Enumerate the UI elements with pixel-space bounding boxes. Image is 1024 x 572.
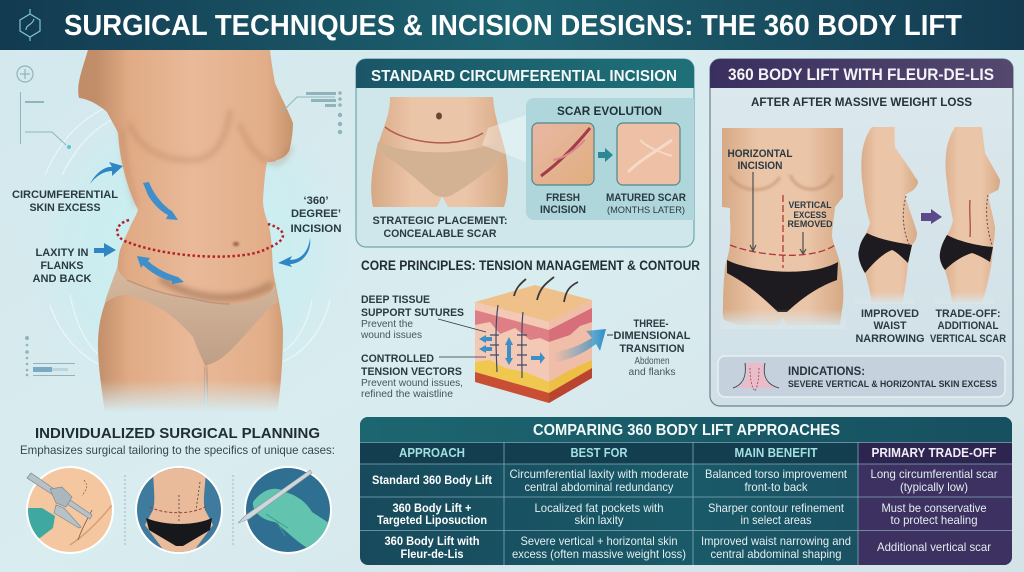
row: standard 360 body lift: front-to back <box>744 480 808 494</box>
row: standard 360 body lift: Standard 360 Body Lift <box>372 473 492 487</box>
vertical incision line <box>782 195 784 268</box>
row: targeted liposuction: Targeted Liposuction <box>377 513 487 527</box>
label: controlled tension vectors: CONTROLLED <box>361 353 434 365</box>
label: fresh incision: INCISION <box>540 204 586 216</box>
caption: STRATEGIC PLACEMENT: <box>372 215 508 227</box>
panel: core principles <box>360 258 700 403</box>
soft chest and waist shading <box>122 112 290 205</box>
label: horizontal incision <box>728 148 793 172</box>
label: trade-off <box>930 308 1006 345</box>
arrow: horizontal incision <box>750 172 806 254</box>
arrow: before to after <box>921 209 942 224</box>
header row: MAIN BENEFIT <box>734 446 818 460</box>
header row <box>399 446 997 460</box>
label: 360 degree incision: ‘360’ <box>304 195 328 207</box>
label: laxity in flanks and back: AND BACK <box>32 273 92 285</box>
row: targeted liposuction: Sharper contour refinement <box>708 501 845 515</box>
table title band <box>360 417 1012 442</box>
heading: SCAR EVOLUTION <box>557 104 662 118</box>
label: laxity in flanks and back: FLANKS <box>40 260 84 272</box>
label: horizontal incision: INCISION <box>738 160 783 172</box>
muscle layer <box>475 372 549 403</box>
panel: scar evolution <box>526 98 694 220</box>
title: SURGICAL TECHNIQUES & INCISION DESIGNS: THE 360 BODY LIFT <box>64 10 962 42</box>
label: deep tissue support sutures <box>360 294 464 341</box>
label: controlled tension vectors: Prevent wound issues, <box>361 377 463 389</box>
header row background <box>360 442 858 464</box>
image: fresh incision <box>532 123 594 185</box>
divider <box>232 475 234 547</box>
label: circumferential skin excess: SKIN EXCESS <box>30 202 100 214</box>
heading: STANDARD CIRCUMFERENTIAL INCISION <box>371 68 677 85</box>
label: deep tissue support sutures: Prevent the <box>361 318 413 330</box>
label: circumferential skin excess: CIRCUMFERENTIAL <box>12 189 118 201</box>
arrow: lower abdomen tension <box>137 256 184 284</box>
icon: logo hexagon <box>20 9 40 41</box>
row: standard 360 body lift: Balanced torso improvement <box>705 467 848 481</box>
label: horizontal incision: HORIZONTAL <box>728 148 793 160</box>
label: trade-off: TRADE-OFF: <box>936 308 1000 320</box>
label: laxity in flanks and back: LAXITY IN <box>36 247 89 259</box>
text: INDICATIONS: <box>788 366 865 378</box>
heading: CORE PRINCIPLES: TENSION MANAGEMENT & CONTOUR <box>361 258 700 273</box>
row: fleur-de-lis: 360 Body Lift with <box>384 534 480 548</box>
label: fresh incision: FRESH <box>546 192 580 204</box>
torso illustration <box>78 50 293 420</box>
header row: PRIMARY TRADE-OFF <box>872 446 997 460</box>
label: matured scar: (MONTHS LATER) <box>607 205 685 216</box>
header row: APPROACH <box>399 446 465 460</box>
row: fleur-de-lis: Severe vertical + horizontal skin <box>520 534 678 548</box>
label: three-dimensional transition: THREE- <box>634 318 669 330</box>
icon: gloved hand with surgical marker <box>238 467 332 553</box>
label: vertical excess removed: REMOVED <box>788 219 833 229</box>
label: vertical excess removed: EXCESS <box>794 210 826 220</box>
fat layer <box>475 360 549 393</box>
label: deep tissue support sutures: SUPPORT SUTURES <box>361 307 464 319</box>
icon: plus badge <box>17 66 33 82</box>
icon: calipers measuring skin <box>24 467 113 553</box>
heading band <box>356 59 694 88</box>
chest shading <box>730 175 833 190</box>
skin cross-section diagram <box>475 277 606 403</box>
label: 360 degree incision: INCISION <box>290 223 342 235</box>
side view figure: after <box>935 127 1000 304</box>
row: targeted liposuction: Must be conservative <box>882 501 987 515</box>
label: three-dimensional transition: and flanks <box>628 366 676 378</box>
label: trade-off: VERTICAL SCAR <box>930 333 1006 345</box>
label: matured scar <box>606 192 686 216</box>
label: 360 degree incision: DEGREE’ <box>291 208 341 220</box>
horizontal incision line <box>730 245 835 255</box>
callout: indications <box>718 356 1005 397</box>
icon: marked torso <box>136 465 222 556</box>
label: 360 degree incision <box>290 195 342 235</box>
label: matured scar: MATURED SCAR <box>606 192 686 204</box>
label: vertical excess removed <box>788 200 833 229</box>
label: controlled tension vectors: TENSION VECTORS <box>361 366 462 378</box>
left face dermis <box>475 302 549 403</box>
table title: COMPARING 360 BODY LIFT APPROACHES <box>533 422 840 439</box>
arrow: three-dimensional transition <box>554 329 606 362</box>
divider <box>124 475 126 547</box>
magnifier connector <box>482 115 526 162</box>
heading band <box>710 59 1013 88</box>
row: standard 360 body lift: (typically low) <box>900 480 968 494</box>
row: targeted liposuction: to protect healing <box>890 513 978 527</box>
row: targeted liposuction: 360 Body Lift + <box>392 501 472 515</box>
pink upper layer <box>475 310 549 342</box>
row: targeted liposuction: Localized fat pockets with <box>534 501 664 515</box>
caption <box>372 215 508 240</box>
label: three-dimensional transition: TRANSITION <box>620 343 685 355</box>
label: controlled tension vectors: refined the waistline <box>361 388 453 400</box>
header row: BEST FOR <box>570 446 628 460</box>
row: targeted liposuction: in select areas <box>740 513 812 527</box>
leader lines <box>438 319 486 357</box>
label: three-dimensional transition <box>607 318 691 378</box>
trade-off header background <box>858 442 1012 464</box>
label: fresh incision <box>540 192 586 216</box>
label: deep tissue support sutures: wound issues <box>360 329 422 341</box>
arrow: circumferential skin excess <box>90 162 123 184</box>
image: matured scar <box>617 123 680 185</box>
row: fleur-de-lis: Improved waist narrowing and <box>701 534 851 548</box>
heading: INDIVIDUALIZED SURGICAL PLANNING <box>35 425 320 442</box>
trade-off column shading <box>858 442 1012 565</box>
label: improved waist narrowing: IMPROVED <box>861 308 919 320</box>
arrow: torso tension <box>143 182 178 220</box>
label: improved waist narrowing: WAIST <box>874 320 907 332</box>
row: fleur-de-lis: excess (often massive weight loss) <box>512 547 686 561</box>
arrow: laxity in flanks <box>94 243 116 257</box>
row: fleur-de-lis: Additional vertical scar <box>877 540 991 554</box>
comparison table <box>360 417 1012 565</box>
row: standard 360 body lift <box>372 467 998 494</box>
HUD data callout bottom <box>25 336 75 376</box>
header banner <box>0 0 1024 50</box>
thigh shading <box>205 366 207 420</box>
side view figure: before <box>855 127 918 304</box>
label: improved waist narrowing: NARROWING <box>856 333 924 345</box>
HUD data callout right <box>281 91 342 134</box>
caption: CONCEALABLE SCAR <box>384 228 497 240</box>
top face <box>475 285 592 322</box>
row: fleur-de-lis: central abdominal shaping <box>710 547 842 561</box>
row: standard 360 body lift: Circumferential laxity with moderate <box>510 467 689 481</box>
row: fleur-de-lis <box>384 534 991 561</box>
heading: 360 BODY LIFT WITH FLEUR-DE-LIS <box>728 65 994 84</box>
label: three-dimensional transition: Abdomen <box>634 355 670 367</box>
label: deep tissue support sutures: DEEP TISSUE <box>361 294 430 306</box>
row: targeted liposuction <box>377 501 987 527</box>
sutures <box>490 305 527 378</box>
scar line <box>385 127 483 143</box>
label: controlled tension vectors <box>361 353 463 400</box>
subheading: AFTER AFTER MASSIVE WEIGHT LOSS <box>751 95 972 109</box>
label: circumferential skin excess <box>12 189 118 214</box>
tension arrows <box>479 335 545 365</box>
label: trade-off: ADDITIONAL <box>938 320 999 332</box>
row: targeted liposuction: skin laxity <box>574 513 624 527</box>
HUD data callout left <box>20 92 71 149</box>
right face dermis <box>549 300 592 403</box>
label: improved waist narrowing <box>856 308 924 345</box>
row: fleur-de-lis: Fleur-de-Lis <box>400 547 464 561</box>
hairs <box>514 277 578 302</box>
description: Emphasizes surgical tailoring to the specifics of unique cases: <box>20 443 335 457</box>
panel: standard circumferential incision <box>356 59 694 247</box>
row: standard 360 body lift: Long circumferential scar <box>870 467 998 481</box>
arrow <box>598 148 613 162</box>
panel: individualized surgical planning <box>20 425 335 556</box>
label: three-dimensional transition: DIMENSIONAL <box>614 330 691 342</box>
label: vertical excess removed: VERTICAL <box>788 200 832 210</box>
underwear <box>105 268 278 365</box>
label: laxity in flanks and back <box>32 247 92 285</box>
icon: fleur-de-lis incision <box>733 363 779 391</box>
panel: main torso diagram <box>0 50 350 420</box>
dashed incision line <box>117 220 283 257</box>
callout: indications: SEVERE VERTICAL & HORIZONTAL SKIN EXCESS <box>788 379 997 390</box>
front view figure <box>720 128 846 329</box>
decorative rings <box>45 108 330 365</box>
panel: 360 body lift with fleur-de-lis <box>710 59 1013 406</box>
grid lines <box>360 442 1012 565</box>
abdominal fold shading <box>160 278 272 298</box>
navel <box>233 242 239 246</box>
arrow: incision <box>278 238 310 267</box>
torso with low incision <box>371 97 508 207</box>
row: standard 360 body lift: central abdominal redundancy <box>524 480 674 494</box>
